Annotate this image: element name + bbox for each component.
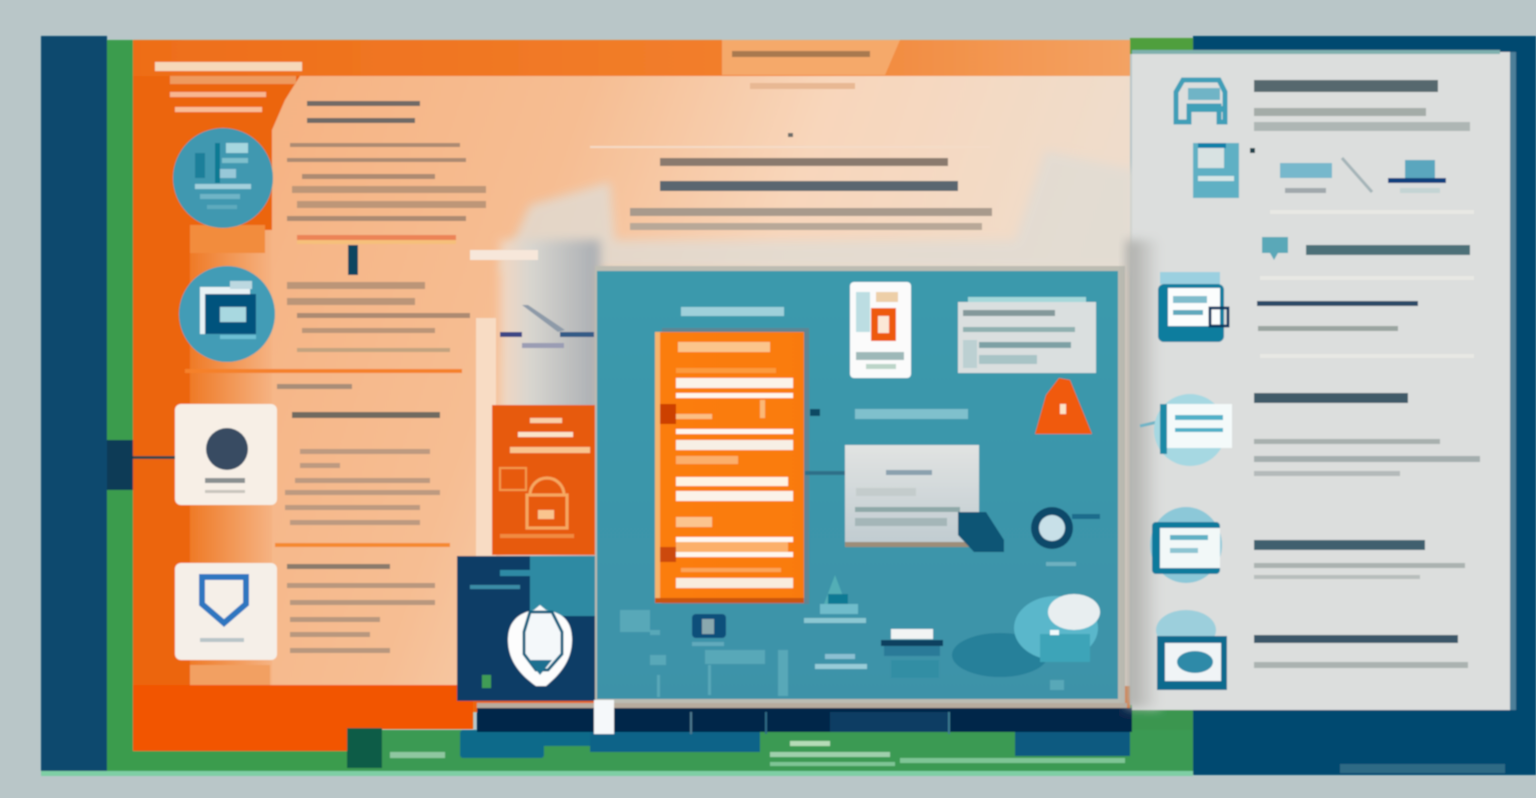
- item: monitor entry: [1156, 610, 1468, 690]
- text block: item 2: [287, 282, 470, 352]
- divider with mark: [297, 235, 456, 275]
- item: speech bubble heading: [1262, 237, 1470, 260]
- connector: [805, 409, 845, 475]
- caption: [855, 409, 968, 419]
- card icon: shield tile: [175, 563, 277, 660]
- printer icon: [881, 629, 943, 678]
- text block: item 1: [287, 101, 486, 221]
- text block: item 4: [287, 564, 435, 653]
- main orange sheet: [133, 40, 1130, 751]
- top centre tab: [722, 40, 900, 89]
- connector line: [133, 456, 175, 459]
- card icon: gear tile: [175, 404, 277, 505]
- item: document entry: [1150, 507, 1465, 583]
- small dark icon: [692, 614, 726, 646]
- left navy spine: [41, 36, 133, 775]
- orange divider: [185, 369, 462, 373]
- item: top entry: [1176, 80, 1470, 131]
- right navy panel backing: [1130, 36, 1536, 775]
- dark shield panel: [457, 556, 602, 701]
- note card: [845, 445, 1004, 552]
- text block: item 3: [275, 384, 450, 547]
- right light panel: [1126, 50, 1516, 710]
- central headline: [590, 133, 992, 230]
- document tile with orange glyph: [850, 282, 911, 378]
- orange document: [655, 328, 809, 604]
- grey skyline behind centre panel: [470, 150, 1135, 560]
- item: screen entry: [1158, 272, 1418, 342]
- bottom green band: [41, 728, 1193, 776]
- item: message entry: [1140, 393, 1480, 476]
- magnifier icon: [1031, 507, 1100, 566]
- orange side box: [492, 405, 597, 555]
- faint chart marks: [620, 610, 1064, 697]
- icon: teal circle document: [173, 128, 273, 228]
- icon: teal circle screen: [179, 266, 275, 362]
- cloud illustration: [952, 594, 1100, 677]
- orange warning triangle: [1035, 378, 1092, 434]
- connector diagram: [500, 305, 594, 348]
- centre teal panel: [477, 266, 1132, 734]
- panel label: [681, 307, 784, 316]
- callout card: [958, 297, 1096, 373]
- item: icon row: [1193, 143, 1446, 198]
- small pyramid icon: [804, 575, 867, 669]
- left heading block: [155, 62, 302, 112]
